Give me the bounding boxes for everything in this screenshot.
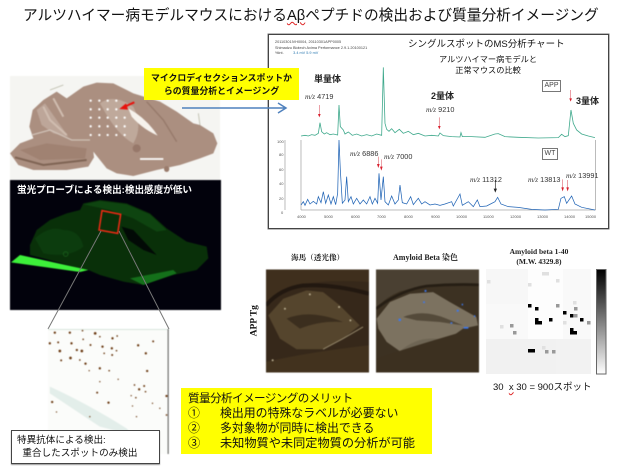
axis labels bbox=[277, 139, 596, 219]
legend: colour scale bbox=[596, 269, 606, 374]
chart header meta: 20110301IVH0004, 20110301APP0005 bbox=[275, 40, 341, 44]
chart subtitle: 正常マウスの比較 bbox=[455, 66, 521, 75]
heading: amyloid beta imaging: Amyloid beta 1-40 bbox=[510, 247, 568, 256]
image: mouse brain section with spots bbox=[10, 76, 220, 180]
heading: amyloid beta stain: Amyloid Beta 染色 bbox=[393, 253, 458, 262]
chart subtitle bbox=[439, 55, 537, 75]
axis labels: 100 bbox=[277, 139, 284, 144]
axis labels: 12000 bbox=[510, 214, 521, 219]
image: fluorescence brain bbox=[9, 179, 222, 311]
axis labels: 5000 bbox=[324, 214, 333, 219]
panel: MS chart bbox=[268, 34, 609, 229]
chart title: シングルスポットのMS分析チャート bbox=[408, 39, 565, 50]
heading: hippocampus: 海馬（透光像） bbox=[291, 253, 344, 262]
axis labels: 60 bbox=[279, 167, 283, 172]
callout: microdissection spot: マイクロディセクションスポットか bbox=[151, 73, 292, 83]
panel: merits of mass spectrometry imaging: 多対象物が同時に検出できる bbox=[220, 421, 374, 435]
m/z 11312: m/z 11312 bbox=[470, 175, 502, 184]
panel: merits of mass spectrometry imaging bbox=[181, 388, 432, 454]
chart header meta bbox=[275, 40, 368, 55]
merit 1 bbox=[188, 406, 398, 420]
chart header meta: %Int. 3.4 mV 5.9 mV bbox=[275, 51, 318, 55]
axis labels: 4000 bbox=[297, 214, 306, 219]
caption: antibody detection: 重合したスポットのみ検出 bbox=[22, 448, 137, 458]
chart: spectra bbox=[284, 67, 596, 210]
callout: microdissection spot: らの質量分析とイメージング bbox=[164, 86, 279, 96]
merit 1: ① bbox=[188, 406, 200, 420]
arrow: callout to chart bbox=[182, 102, 288, 114]
axis labels: 40 bbox=[279, 181, 283, 186]
m/z 6886: m/z 6886 bbox=[350, 149, 378, 158]
axis labels: 6000 bbox=[351, 214, 360, 219]
m/z 9210: m/z 9210 bbox=[426, 105, 454, 114]
image: hippocampus amyloid stain bbox=[375, 268, 480, 374]
caption: antibody detection bbox=[11, 430, 160, 464]
image: immunostained section bbox=[48, 328, 170, 454]
WT box: WT bbox=[545, 150, 555, 157]
chart header meta: Shimadzu Biotech Axima Performance 2.9.1.20100121 bbox=[275, 46, 367, 50]
axis labels: 13000 bbox=[537, 214, 548, 219]
WT box bbox=[542, 148, 558, 160]
panel: merits of mass spectrometry imaging: 未知物質や未同定物質の分析が可能 bbox=[220, 436, 415, 450]
title: アルツハイマー病モデルマウスにおけるAβペプチドの検出および質量分析イメージング bbox=[23, 8, 599, 24]
APP box: APP bbox=[544, 82, 558, 89]
m/z 13813: m/z 13813 bbox=[528, 175, 560, 184]
callout: microdissection spot bbox=[144, 68, 299, 100]
heading: amyloid beta imaging: (M.W. 4329.8) bbox=[516, 257, 562, 266]
dimer label: 2量体 bbox=[431, 91, 454, 101]
merit 3 bbox=[188, 436, 415, 450]
label: APP Tg: APP Tg bbox=[249, 305, 259, 336]
merit 2 bbox=[188, 421, 374, 435]
axis labels: 11000 bbox=[483, 214, 494, 219]
fluorescence heading: 蛍光プローブによる検出:検出感度が低い bbox=[17, 185, 192, 196]
merits heading: 質量分析イメージングのメリット bbox=[188, 392, 353, 405]
merit 3: ③ bbox=[188, 436, 200, 450]
axis labels: 15000 bbox=[585, 214, 596, 219]
axis labels: 7000 bbox=[377, 214, 386, 219]
chart: imaging heat map bbox=[486, 272, 591, 374]
panel: merits of mass spectrometry imaging: 検出用の特殊なラベルが必要ない bbox=[220, 406, 398, 420]
chart subtitle: アルツハイマー病モデルと bbox=[439, 55, 537, 64]
axis labels: 0 bbox=[281, 210, 283, 215]
merit 2: ② bbox=[188, 421, 200, 435]
image: hippocampus transmitted light bbox=[265, 268, 370, 374]
axis labels: 20 bbox=[279, 196, 283, 201]
m/z 13991: m/z 13991 bbox=[566, 171, 598, 180]
axis labels: 10000 bbox=[456, 214, 467, 219]
APP box bbox=[542, 80, 561, 92]
m/z 7000: m/z 7000 bbox=[384, 152, 412, 161]
m/z 4719: m/z 4719 bbox=[305, 92, 333, 101]
zoom guide lines bbox=[48, 230, 170, 330]
caption: antibody detection: 特異抗体による検出: bbox=[17, 435, 106, 446]
trimer label: 3量体 bbox=[576, 96, 599, 106]
heading: amyloid beta imaging bbox=[510, 247, 568, 266]
axis labels: 8000 bbox=[404, 214, 413, 219]
axis labels: 9000 bbox=[431, 214, 440, 219]
axis labels: 14000 bbox=[564, 214, 575, 219]
axis labels: 80 bbox=[279, 152, 283, 157]
spot count: 30 x 30 = 900スポット bbox=[493, 382, 592, 393]
monomer label: 単量体 bbox=[314, 74, 341, 84]
